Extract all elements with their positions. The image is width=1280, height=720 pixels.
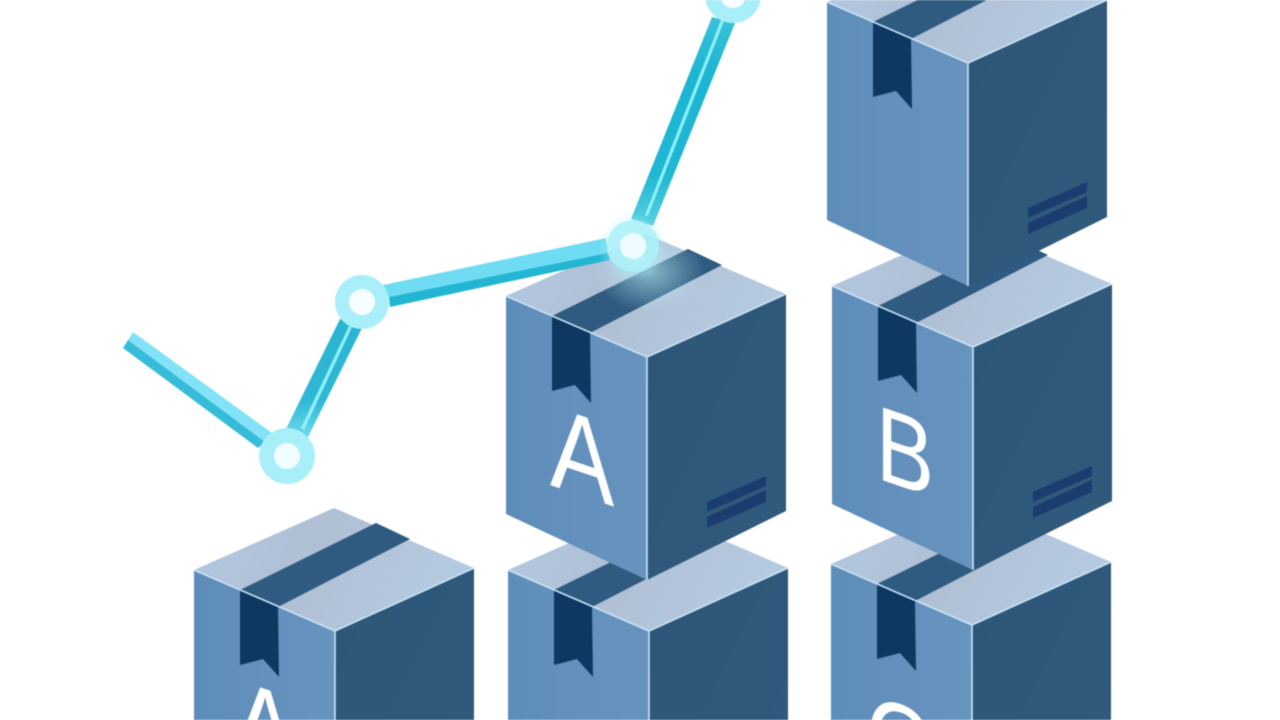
- box: bottom left, labelled A: [194, 508, 474, 720]
- line chart: rising trend line: [123, 0, 761, 484]
- box: middle of right column, labelled B: [832, 224, 1112, 570]
- segment: first, falling: [123, 332, 272, 448]
- box: top of middle column, labelled A: [506, 234, 786, 580]
- marker: point 3 with glow: [602, 216, 700, 308]
- illustration: boxes stacked as a bar chart with a rising line: [122, 0, 1113, 720]
- segment: second, rising: [286, 319, 362, 437]
- box: middle of right column, labelled B: B: [876, 383, 934, 521]
- marker: point 2: [335, 275, 389, 329]
- box: bottom of right column, labelled C: [831, 502, 1111, 720]
- box: top of middle column, labelled A: A: [550, 381, 614, 532]
- segment: fourth, steep rise: [631, 17, 735, 226]
- marker: point 4: [705, 0, 761, 23]
- segment: third, gentle rise: [383, 238, 610, 307]
- marker: point 1: [259, 428, 315, 484]
- box: top of right column: [827, 0, 1107, 286]
- box: bottom of middle column: [508, 508, 788, 720]
